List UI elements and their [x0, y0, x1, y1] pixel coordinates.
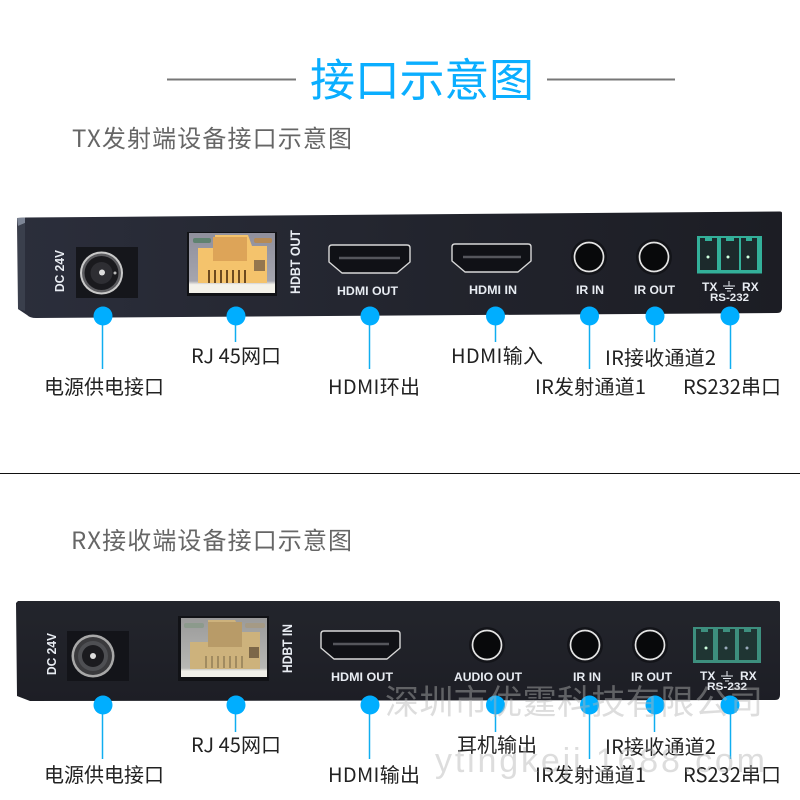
watermark: ytingkeji.1688.com	[435, 742, 765, 780]
callout: IR 1	[535, 306, 646, 400]
callout: IR 2	[605, 306, 716, 371]
HDMI OUT label: HDMI OUT	[337, 284, 399, 298]
TX device body	[17, 212, 782, 318]
callout: RX IR 1	[535, 696, 646, 788]
AUDIO OUT label: AUDIO OUT	[454, 670, 523, 684]
RX IR IN label: IR IN	[573, 670, 601, 684]
callout: RX RJ45	[191, 696, 281, 758]
callout: RX IR 2: IR接收通道2	[605, 731, 716, 760]
callout: IR 1: IR发射通道1	[535, 371, 646, 400]
heading: RX device: RX接收端设备接口示意图	[71, 521, 352, 556]
callout: RX RS232: RS232串口	[683, 759, 781, 788]
watermark	[385, 684, 765, 780]
callouts: RX connectors	[44, 696, 781, 788]
RX RS-232 labels: RX	[740, 669, 757, 683]
icon: TX power jack	[76, 247, 138, 298]
RX power label: DC 24V	[44, 633, 59, 675]
TX HDBT OUT label: HDBT OUT	[287, 230, 303, 294]
RX RS-232 labels	[700, 669, 757, 693]
RX device body	[16, 601, 780, 701]
callout: HDMI in	[451, 306, 543, 369]
watermark: 深圳市优霆科技有限公司	[385, 684, 763, 722]
icon: RX terminal block	[693, 627, 761, 663]
callouts: TX connectors	[44, 306, 781, 400]
callout: RJ45: RJ 45网口	[191, 340, 281, 369]
callout: RX power	[44, 696, 164, 788]
TX power label: DC 24V	[52, 250, 67, 292]
callout: RS232	[683, 306, 781, 400]
callout: HDMI loop	[328, 306, 420, 400]
heading: TX device: TX发射端设备接口示意图	[72, 119, 352, 154]
IR IN label: IR IN	[576, 283, 604, 297]
icon: TX RJ45 port	[187, 232, 277, 296]
callout: RX headphone	[457, 696, 537, 758]
callout: RX IR 2	[605, 696, 716, 760]
icon: TX IR IN jack	[571, 239, 607, 275]
RX RS-232 labels: TX	[700, 669, 715, 683]
RX RS-232 labels: RS-232	[707, 681, 747, 693]
icon: RX audio jack	[469, 627, 505, 663]
icon: RX power jack	[67, 631, 129, 681]
callout: RX HDMI out: HDMI输出	[328, 759, 420, 788]
icon: TX HDMI OUT port	[329, 245, 410, 273]
callout: power: 电源供电接口	[44, 371, 164, 400]
callout: RX power: 电源供电接口	[44, 759, 164, 788]
callout: RX IR 1: IR发射通道1	[535, 759, 646, 788]
panel: RX device rear	[16, 601, 780, 701]
RS-232 labels: RS-232	[710, 292, 749, 304]
RS-232 labels	[702, 280, 759, 304]
HDMI IN label: HDMI IN	[469, 283, 517, 297]
RS-232 labels: RX	[742, 280, 759, 294]
icon: RX HDMI OUT port	[321, 631, 400, 659]
icon: RX RJ45 port	[178, 616, 269, 681]
icon: RX IR OUT jack	[632, 627, 668, 663]
panel: TX device rear	[17, 212, 782, 318]
callout: RX RS232	[683, 696, 781, 788]
icon: RX IR IN jack	[567, 627, 603, 663]
RX HDMI OUT label: HDMI OUT	[331, 670, 394, 684]
callout: RJ45	[191, 306, 281, 369]
callout: RS232: RS232串口	[683, 371, 781, 400]
callout: power	[44, 306, 164, 400]
title: 接口示意图	[310, 44, 534, 109]
RX HDBT IN label: HDBT IN	[279, 624, 295, 673]
callout: IR 2: IR接收通道2	[605, 342, 716, 371]
IR OUT label: IR OUT	[634, 283, 676, 297]
callout: HDMI in: HDMI输入	[451, 340, 543, 369]
callout: RX HDMI out	[328, 696, 420, 788]
callout: HDMI loop: HDMI环出	[328, 371, 420, 400]
icon: TX IR OUT jack	[636, 239, 672, 275]
icon: TX HDMI IN port	[452, 244, 531, 272]
callout: RX RJ45: RJ 45网口	[191, 729, 281, 758]
callout: RX headphone: 耳机输出	[457, 729, 537, 758]
RX IR OUT label: IR OUT	[631, 670, 673, 684]
icon: TX terminal block	[697, 236, 762, 274]
RS-232 labels: TX	[702, 280, 717, 294]
